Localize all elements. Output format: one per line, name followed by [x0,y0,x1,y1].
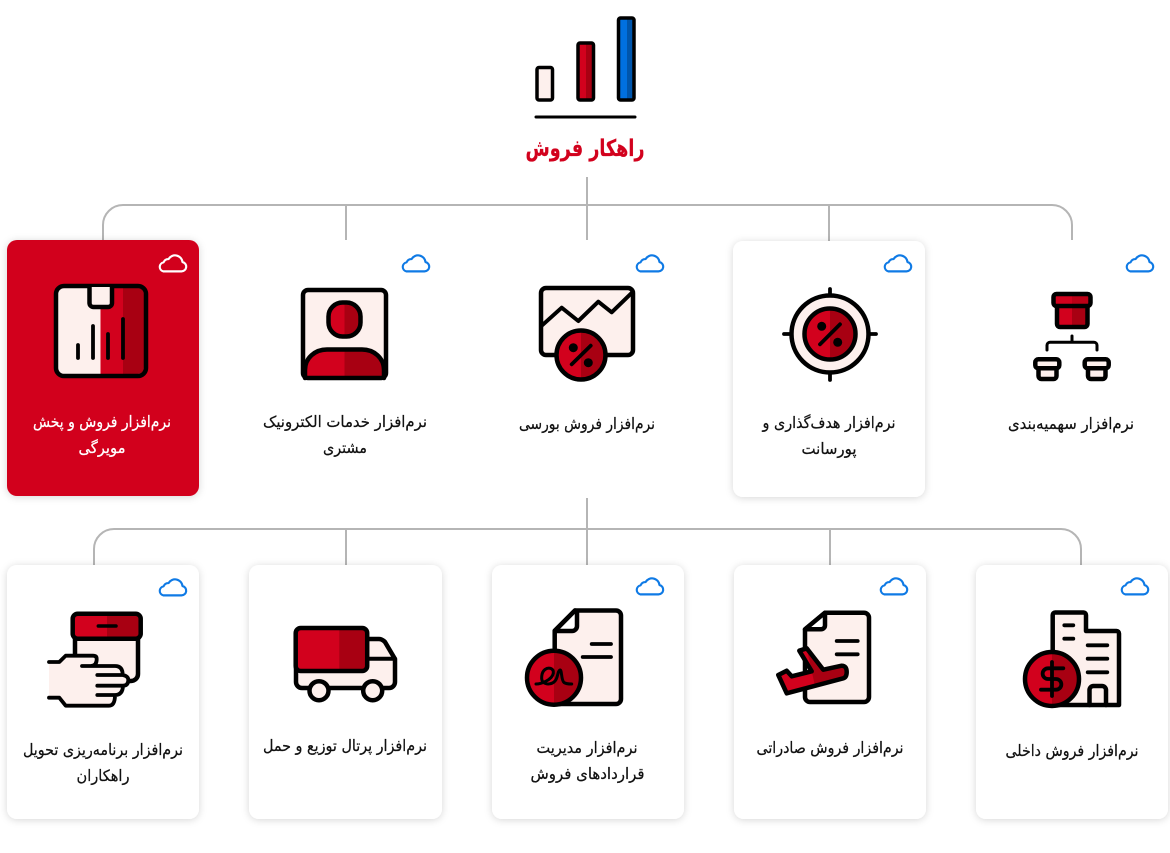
label: مویرگی [78,439,126,457]
icon: chart and percent [541,288,633,380]
icon: cloud [160,579,186,595]
icon: cloud [637,255,663,271]
connector lines: top row [103,177,1072,241]
panel: target and commission [733,241,925,497]
icon: truck [296,628,395,700]
label: نرم‌افزار فروش صادراتی [756,739,904,758]
label: قراردادهای فروش [530,765,644,784]
icon: org chart boxes [1035,294,1109,379]
label [33,413,171,457]
label: راهکاران [76,767,130,785]
label [23,741,183,785]
label: نرم‌افزار خدمات الکترونیک [263,413,427,432]
panel: quota allocation [975,241,1168,497]
label [762,414,896,459]
label: نرم‌افزار پرتال توزیع و حمل [263,737,427,756]
panel: capillary distribution [7,240,199,496]
label: نرم‌افزار فروش بورسی [519,415,655,434]
panel: export sales [734,565,926,819]
label: مشتری [323,439,367,457]
label: نرم‌افزار برنامه‌ریزی تحویل [23,741,183,759]
panel: stock exchange sales [491,241,684,497]
label: نرم‌افزار سهمیه‌بندی [1008,415,1134,434]
label: پورسانت [802,440,856,459]
panel: domestic sales [976,565,1168,819]
icon: cloud [160,255,186,271]
icon: cloud [637,578,663,594]
panel: sales contracts [492,565,684,819]
panel: delivery planning [7,565,199,819]
icon: cloud [885,255,911,271]
icon: cloud [1122,578,1148,594]
icon: cloud [881,578,907,594]
icon: hand holding box [49,614,141,706]
icon: cloud [403,255,429,271]
connector lines: bottom row [94,498,1081,565]
panel: customer e-services [249,241,442,497]
label: نرم‌افزار فروش داخلی [1006,742,1138,761]
icon: building with dollar [1025,612,1119,706]
label: نرم‌افزار فروش و پخش [33,413,171,432]
label [530,739,644,784]
icon: person card [303,290,386,378]
header logo: bar chart icon [536,18,635,117]
title: راهکار فروش [526,136,644,162]
icon: signed document [527,610,621,705]
label [263,413,427,457]
label: نرم‌افزار هدف‌گذاری و [762,414,896,433]
panel: distribution portal [249,565,442,819]
icon: target percent [784,289,876,380]
icon: document with plane [778,613,869,702]
icon: cloud [1127,255,1153,271]
icon: box with bars [56,286,146,376]
label: نرم‌افزار مدیریت [536,739,638,757]
